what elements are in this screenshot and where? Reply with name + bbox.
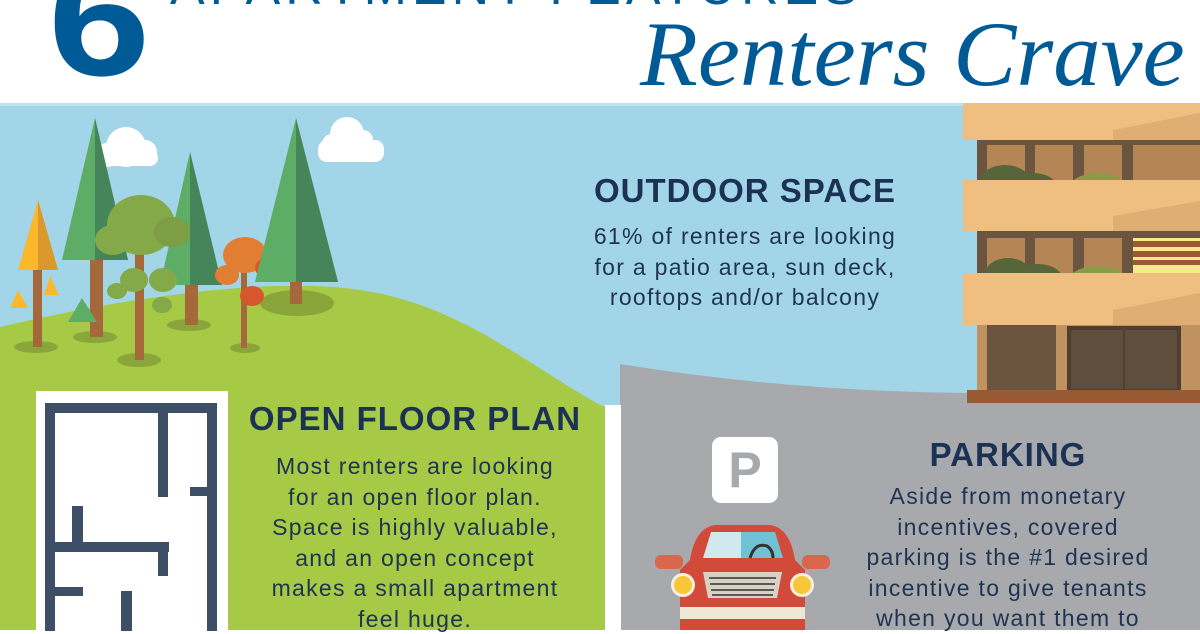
text: parking: incentives, covered <box>897 514 1119 540</box>
text: parking: Aside from monetary <box>890 483 1126 509</box>
text: outdoor space <box>594 223 896 310</box>
hill <box>0 286 620 630</box>
icon: floor plan <box>36 391 228 631</box>
trees <box>10 118 338 367</box>
text: open floor plan: for an open floor plan. <box>288 484 542 510</box>
text: outdoor space: rooftops and/or balcony <box>610 284 880 310</box>
text: open floor plan: Most renters are looking <box>276 453 554 479</box>
text: open floor plan <box>272 453 558 632</box>
clouds <box>95 117 384 167</box>
title: Renters Crave: Renters Crave <box>640 3 1185 105</box>
text: open floor plan: Space is highly valuable, <box>272 514 558 540</box>
text: parking: parking is the #1 desired <box>866 544 1150 570</box>
text: open floor plan: feel huge. <box>358 606 472 632</box>
heading: open floor plan: OPEN FLOOR PLAN <box>249 400 581 437</box>
text: outdoor space: for a patio area, sun deck, <box>594 254 896 280</box>
text: parking: incentive to give tenants <box>868 574 1148 600</box>
gray parking area <box>620 364 1200 630</box>
icon: parking sign <box>712 437 778 503</box>
icon: parking sign: P <box>728 442 762 498</box>
text: open floor plan: makes a small apartment <box>272 575 558 601</box>
heading: parking: PARKING <box>930 436 1086 473</box>
text: parking: when you want them to <box>876 605 1140 631</box>
text: parking <box>866 483 1150 631</box>
icon: car <box>655 525 830 630</box>
text: outdoor space: 61% of renters are looking <box>594 223 896 249</box>
building <box>963 103 1200 403</box>
text: open floor plan: and an open concept <box>295 544 535 570</box>
heading: outdoor space: OUTDOOR SPACE <box>594 172 896 209</box>
